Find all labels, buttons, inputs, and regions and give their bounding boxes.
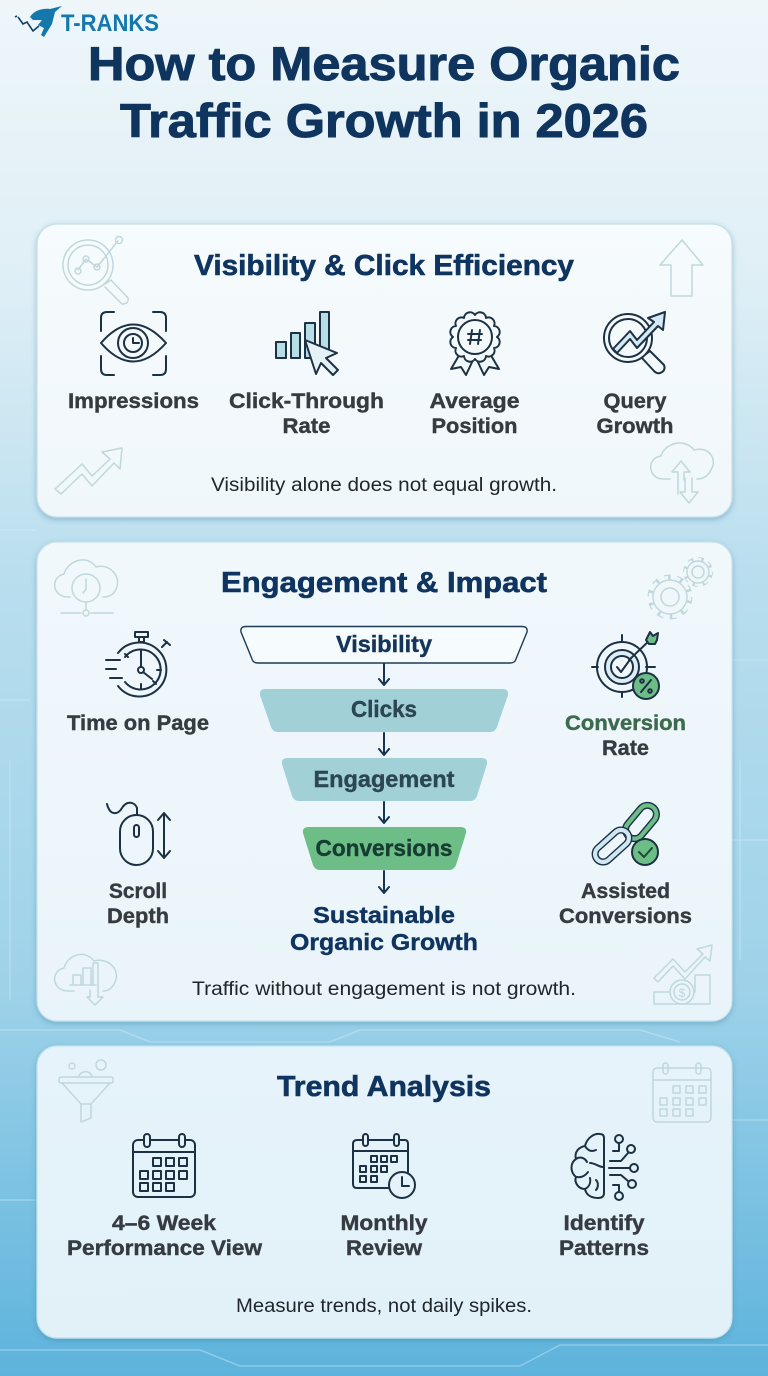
label — [340, 1212, 428, 1260]
icon: calendar with clock — [353, 1134, 415, 1198]
arrow — [379, 664, 389, 685]
label: Conversions — [559, 905, 692, 928]
note: Measure trends, not daily spikes. — [236, 1296, 532, 1317]
faint icon: cloud clock — [55, 560, 118, 616]
label: Scroll — [109, 880, 167, 903]
icon: bars and cursor — [276, 312, 338, 375]
panel: engagement and impact — [37, 542, 732, 1021]
faint icon: revenue growth — [654, 945, 712, 1004]
outcome: Organic Growth — [290, 929, 478, 955]
faint icon: magnifier chart — [63, 236, 128, 304]
stage: clicks: Clicks — [351, 696, 417, 722]
outcome — [290, 902, 478, 955]
faint icon: revenue growth: $ — [679, 986, 686, 1000]
faint icon: gears — [651, 560, 710, 616]
icon: target with percent — [592, 632, 659, 699]
label: Assisted — [581, 880, 670, 903]
panel: trend analysis — [37, 1046, 732, 1338]
faint icon: cloud with arrows — [651, 443, 713, 503]
icon: calendar — [133, 1134, 195, 1197]
logo mark — [15, 6, 62, 37]
stage: engagement — [282, 758, 487, 801]
stage: visibility: Visibility — [336, 631, 432, 657]
label: Click-Through — [229, 390, 384, 413]
label — [596, 390, 674, 438]
label: Conversion — [565, 712, 686, 735]
outcome: Sustainable — [313, 902, 455, 928]
icon: query growth — [604, 312, 665, 373]
label: Query — [604, 390, 667, 413]
faint icon: up arrow — [660, 240, 703, 296]
icon: stopwatch — [106, 632, 170, 696]
label — [565, 712, 686, 760]
label: Position — [432, 415, 518, 438]
small gear — [686, 560, 710, 584]
label — [107, 880, 169, 928]
stage: conversions — [303, 827, 466, 870]
large gear — [651, 578, 689, 616]
check badge — [632, 839, 658, 865]
heading: Engagement & Impact — [221, 567, 547, 599]
icon: eye — [101, 312, 166, 375]
label: Depth — [107, 905, 169, 928]
icon: ranking badge — [450, 312, 500, 375]
arrow — [379, 733, 389, 755]
stage: conversions: Conversions — [316, 835, 452, 861]
label — [229, 390, 384, 438]
label: Patterns — [559, 1237, 649, 1260]
faint icon: calendar — [653, 1063, 711, 1122]
stage: clicks — [260, 689, 508, 732]
label: Impressions — [68, 390, 199, 413]
label: Performance View — [67, 1237, 263, 1260]
title: Traffic Growth in 2026 — [120, 94, 648, 147]
label: 4–6 Week — [112, 1212, 216, 1235]
label: Review — [346, 1237, 423, 1260]
label: Rate — [602, 737, 649, 760]
stage: engagement: Engagement — [314, 766, 455, 792]
label — [430, 390, 520, 438]
label: Average — [430, 390, 520, 413]
title: How to Measure Organic — [88, 37, 680, 90]
faint icon: filter funnel — [59, 1060, 113, 1122]
heading: Trend Analysis — [277, 1071, 491, 1103]
note: Traffic without engagement is not growth. — [192, 979, 576, 1000]
icon: chain link with check — [592, 802, 660, 865]
funnel — [241, 626, 527, 955]
faint icon: rising arrow — [55, 448, 122, 494]
logo: T-RANKS — [15, 6, 159, 37]
label: Identify — [564, 1212, 645, 1235]
arrow — [379, 871, 389, 893]
green link — [622, 802, 660, 842]
heading: Visibility & Click Efficiency — [194, 250, 574, 282]
label: Rate — [282, 415, 330, 438]
panel: visibility and click efficiency — [37, 224, 732, 517]
icon: mouse and scroll arrow — [107, 803, 170, 865]
stage: visibility — [241, 626, 527, 663]
title — [88, 37, 680, 147]
label — [559, 1212, 649, 1260]
faint icon: cloud chart — [55, 954, 117, 1005]
note: Visibility alone does not equal growth. — [211, 475, 557, 496]
label — [559, 880, 692, 928]
label: Time on Page — [67, 712, 209, 735]
blue link — [592, 827, 632, 865]
logo text: T-RANKS — [61, 10, 159, 37]
label — [67, 1212, 263, 1260]
label: Monthly — [340, 1212, 428, 1235]
label: Growth — [596, 415, 674, 438]
icon: brain circuit — [572, 1134, 638, 1200]
arrow — [379, 802, 389, 823]
